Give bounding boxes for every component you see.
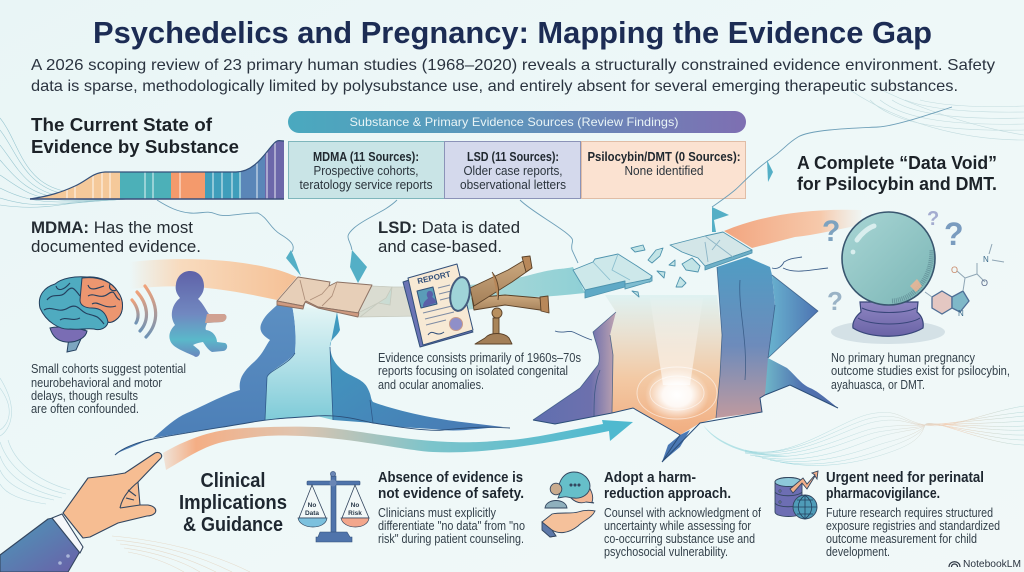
- central shaft: [265, 305, 337, 420]
- text: MDMA evidence: [31, 362, 186, 416]
- heading: LSD: LSD: Data is dated: [378, 218, 520, 237]
- icon: question marks: ?: [944, 216, 964, 252]
- bridge: crumbling stone: [358, 286, 420, 317]
- icon: balance scale: No: [308, 502, 316, 509]
- stem: [67, 330, 85, 352]
- cell: LSD: [444, 142, 580, 198]
- icon: balance scale: Risk: [348, 510, 362, 517]
- cell: LSD: Older case reports,: [464, 164, 562, 178]
- text: MDMA evidence: neurobehavioral and motor: [31, 376, 162, 390]
- text: MDMA evidence: delays, though results: [31, 389, 138, 403]
- header pill: substance and sources: [288, 111, 746, 133]
- heading: current state of evidence: The Current State of: [31, 114, 213, 135]
- chasm: left: [115, 305, 510, 455]
- stand: [493, 318, 499, 336]
- icon: question marks: ?: [827, 286, 843, 316]
- heading: clinical implications: & Guidance: [183, 514, 283, 536]
- icon: baby silhouette: [169, 271, 227, 357]
- header pill: substance and sources: Substance & Primary Evidence Sources (Review Findings): [350, 115, 678, 129]
- cell: LSD: LSD (11 Sources):: [467, 150, 559, 164]
- text: data void evidence: ayahuasca, or DMT.: [831, 378, 925, 392]
- icon: telescope: [448, 256, 549, 344]
- icon: question marks: ?: [822, 215, 840, 248]
- guidance: absence of evidence: differentiate "no data" from "no: [378, 519, 525, 533]
- heading: current state of evidence: Evidence by Substance: [31, 136, 239, 157]
- icon: brain: [39, 277, 122, 352]
- guidance: harm reduction: uncertainty while assessing for: [604, 519, 751, 533]
- icon: pointing hand: [0, 452, 162, 572]
- lens: [448, 276, 472, 312]
- guidance: pharmacovigilance: pharmacovigilance.: [826, 486, 940, 502]
- cell: MDMA: [288, 142, 444, 198]
- guidance: harm reduction: Counsel with acknowledgment of: [604, 506, 761, 520]
- icon: case report document: [403, 264, 473, 347]
- crack fragments at top: [286, 160, 773, 283]
- cell: Psilocybin/DMT: None identified: [624, 164, 704, 178]
- guidance: pharmacovigilance: Future research requires structured: [826, 506, 993, 520]
- text: data void evidence: No primary human pregnancy: [831, 351, 976, 365]
- text: MDMA evidence: are often confounded.: [31, 402, 139, 416]
- subtitle: A 2026 scoping review of 23 primary human studies (1968–2020) reveals a structurally constrained evidence environment. Safety: [31, 57, 995, 74]
- icon: sound waves: [132, 286, 156, 337]
- guidance: harm reduction: Adopt a harm-: [604, 470, 696, 486]
- icon: balance scale: Data: [305, 510, 319, 517]
- guidance: absence of evidence: Clinicians must explicitly: [378, 506, 497, 520]
- sleeve: [0, 517, 82, 572]
- icon: conversation and open hand: [542, 472, 595, 537]
- chasm: main void: [533, 257, 838, 462]
- guidance: pharmacovigilance: [826, 470, 1000, 559]
- icon: database, growth arrow and globe: [775, 471, 818, 519]
- icon: molecule: [925, 244, 1004, 318]
- heading: clinical implications: Implications: [179, 492, 287, 514]
- cell: MDMA: MDMA (11 Sources):: [313, 150, 419, 164]
- text: LSD evidence: [378, 351, 581, 392]
- bridge: glass left section: [573, 254, 652, 298]
- wave bundle: lower right: [703, 406, 1024, 465]
- heading: LSD second line: and case-based.: [378, 237, 502, 256]
- central shaft: [605, 295, 722, 435]
- subtitle: [31, 57, 995, 95]
- light beam: [650, 298, 703, 385]
- icon: question marks: [822, 208, 964, 316]
- text: LSD evidence: reports focusing on isolated congenital: [378, 364, 568, 378]
- right wall: [716, 257, 775, 418]
- icon: question marks: ?: [927, 208, 939, 230]
- cell: Psilocybin/DMT: Psilocybin/DMT (0 Sources):: [588, 150, 740, 164]
- cuff: [52, 514, 83, 553]
- guidance: pharmacovigilance: outcome measurement for child: [826, 532, 977, 546]
- cell: Psilocybin/DMT: [582, 142, 746, 198]
- guidance: absence of evidence: not evidence of safety.: [378, 486, 524, 502]
- icon: molecule: O: [981, 278, 988, 288]
- guidance: harm reduction: [604, 470, 761, 559]
- text: LSD evidence: and ocular anomalies.: [378, 378, 484, 392]
- cell: MDMA: teratology service reports: [300, 178, 432, 192]
- ribbon: LSD evidence path: [358, 267, 585, 317]
- wave lines: top left: [0, 118, 130, 207]
- icon: case report document: REPORT: [416, 270, 452, 286]
- table: evidence sources: [288, 142, 746, 198]
- bottom spike: [662, 430, 690, 462]
- guidance: harm reduction: co-occurring substance use and: [604, 532, 755, 546]
- icon: molecule: O: [951, 265, 958, 275]
- lower tube: [472, 295, 548, 312]
- heading: data void: [797, 152, 997, 194]
- right wall: [330, 312, 503, 431]
- heading: MDMA: MDMA: Has the most: [31, 218, 193, 237]
- bridge: glass fragments: [631, 245, 700, 297]
- upper hemisphere: [80, 278, 122, 322]
- upper tube: [470, 258, 532, 306]
- wave lines: lower left: [0, 378, 70, 504]
- icon: crystal ball: [831, 212, 945, 344]
- guidance: pharmacovigilance: development.: [826, 545, 890, 559]
- icon: balance scale: No: [351, 502, 359, 509]
- watermark: NotebookLM: NotebookLM: [963, 558, 1021, 570]
- heading: data void: A Complete “Data Void”: [797, 152, 997, 173]
- text: MDMA evidence: Small cohorts suggest potential: [31, 362, 186, 376]
- arrow: clinical guidance sweep: [163, 420, 633, 470]
- chart: evidence profile bar: [30, 140, 284, 200]
- cell: LSD: observational letters: [460, 178, 566, 192]
- guidance: absence of evidence: risk" during patient counseling.: [378, 532, 524, 546]
- heading: clinical implications: [179, 470, 287, 536]
- heading: MDMA second line: documented evidence.: [31, 237, 201, 256]
- heading: data void: for Psilocybin and DMT.: [797, 173, 997, 194]
- heading: clinical implications: Clinical: [200, 470, 266, 492]
- left wall: [533, 312, 616, 424]
- wave lines: bottom centre: [112, 536, 250, 572]
- left wall: [115, 305, 296, 454]
- wave lines: top right: [850, 84, 1024, 140]
- right triangle wall: [768, 275, 818, 358]
- icon: balance scale: [298, 471, 369, 542]
- subtitle: data is sparse, methodologically limited by polysubstance use, and entirely absent for several emerging therapeutic substances.: [31, 78, 958, 95]
- icon: molecule: N: [958, 309, 964, 318]
- text: data void evidence: [831, 351, 1010, 392]
- glow rings: [637, 367, 717, 419]
- hand: [63, 452, 162, 538]
- bridge: far-side section: [670, 232, 752, 270]
- lower right spur: [765, 358, 838, 408]
- cell: MDMA: Prospective cohorts,: [314, 164, 418, 178]
- text: LSD evidence: Evidence consists primarily of 1960s–70s: [378, 351, 581, 365]
- glow: [645, 369, 709, 421]
- crack lines: [157, 107, 952, 340]
- ribbon: MDMA evidence path: [130, 259, 297, 300]
- heading: current state of evidence: [31, 114, 239, 157]
- title: Psychedelics and Pregnancy: Mapping the Evidence Gap: [93, 15, 932, 50]
- guidance: absence of evidence: Absence of evidence is: [378, 470, 523, 486]
- guidance: absence of evidence: [378, 470, 525, 546]
- guidance: pharmacovigilance: Urgent need for perinatal: [826, 470, 984, 486]
- lower hemisphere: [39, 277, 122, 330]
- icon: molecule: N: [983, 255, 989, 264]
- ribbon: psilocybin path: [724, 210, 862, 248]
- guidance: harm reduction: reduction approach.: [604, 486, 731, 502]
- guidance: harm reduction: psychosocial vulnerability.: [604, 545, 728, 559]
- cerebellum: [50, 327, 87, 342]
- bridge: intact section: [277, 277, 372, 317]
